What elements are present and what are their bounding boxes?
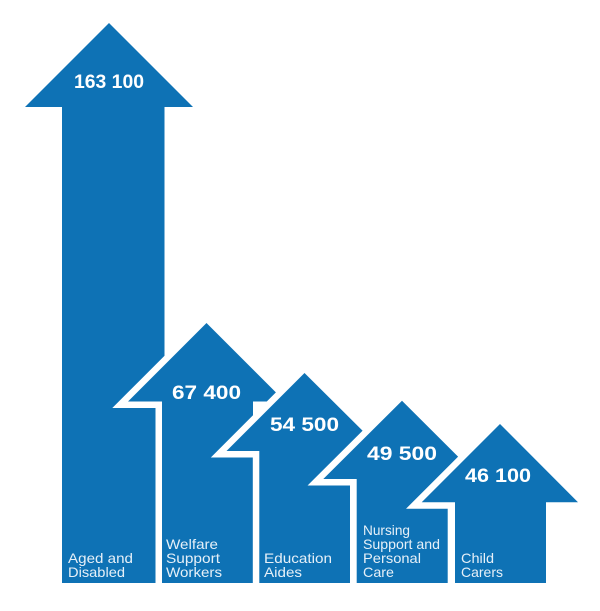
arrow: Nursing Support and Personal Care xyxy=(323,401,480,583)
arrow: Education Aides xyxy=(226,373,383,583)
arrow: Aged and Disabled xyxy=(25,23,193,583)
arrow: Welfare Support Workers: Support xyxy=(166,550,220,566)
arrow: Child Carers: 46 100 xyxy=(465,465,531,487)
arrow: Nursing Support and Personal Care: Support and xyxy=(363,536,440,552)
arrow: Education Aides: 54 500 xyxy=(270,414,339,436)
arrow: Education Aides: Education xyxy=(264,550,332,566)
arrow: Nursing Support and Personal Care: Care xyxy=(363,564,394,580)
arrow: Welfare Support Workers: Workers xyxy=(166,564,222,580)
arrow: Child Carers xyxy=(422,424,578,583)
arrow: Child Carers: Carers xyxy=(461,564,503,580)
arrow: Aged and Disabled: 163 100 xyxy=(74,71,144,93)
arrow: Nursing Support and Personal Care: Personal xyxy=(363,550,421,566)
arrow: Welfare Support Workers: Welfare xyxy=(166,536,218,552)
arrow: Child Carers: Child xyxy=(461,550,494,566)
arrow: Nursing Support and Personal Care: 49 500 xyxy=(367,443,437,465)
arrow: Aged and Disabled: Disabled xyxy=(68,564,125,580)
arrow: Aged and Disabled: Aged and xyxy=(68,550,133,566)
arrow: Welfare Support Workers xyxy=(128,323,285,583)
arrow: Education Aides: Aides xyxy=(264,564,302,580)
arrow: Nursing Support and Personal Care: Nursing xyxy=(363,522,410,538)
arrow: Welfare Support Workers: 67 400 xyxy=(172,382,241,404)
